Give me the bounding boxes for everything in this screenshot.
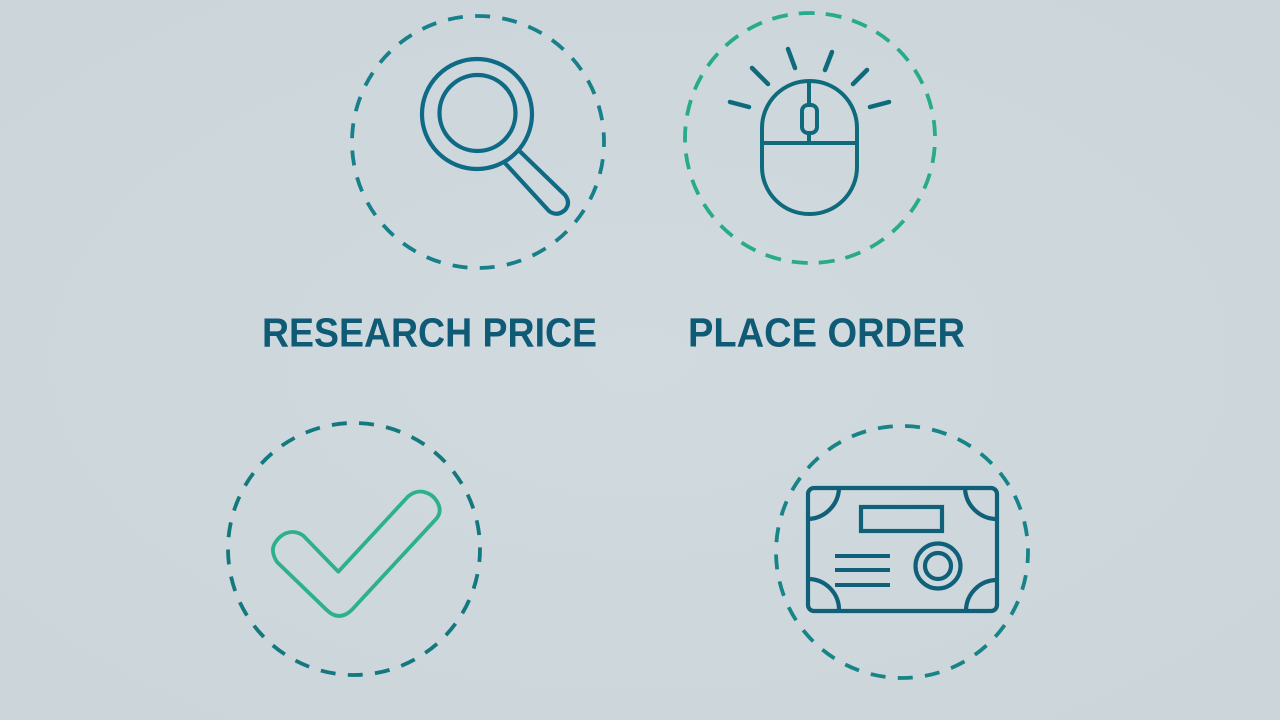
icon: check mark <box>273 492 440 616</box>
step: confirmation <box>228 423 480 675</box>
dashed circle: certificate <box>776 426 1028 678</box>
dashed circle: place order <box>685 13 935 263</box>
step: place order <box>685 13 935 263</box>
heading: place order: PLACE ORDER <box>688 310 965 356</box>
icon: certificate <box>808 488 997 611</box>
heading: research price: RESEARCH PRICE <box>262 310 597 356</box>
step: research price <box>352 16 604 268</box>
icon: magnifying glass <box>422 59 568 214</box>
icon: computer mouse with click rays <box>730 49 889 214</box>
dashed circle: research <box>352 16 604 268</box>
step: certificate <box>776 426 1028 678</box>
dashed circle: confirmation <box>228 423 480 675</box>
